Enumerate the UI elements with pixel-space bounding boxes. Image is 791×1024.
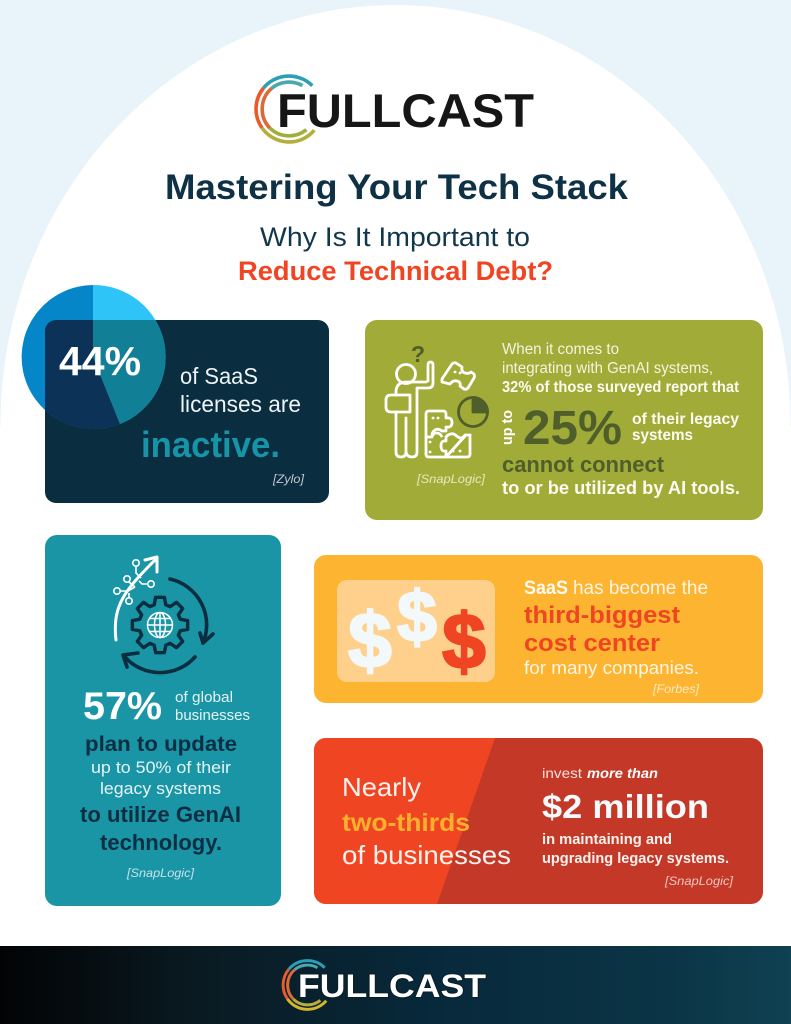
text: intro: integrating with GenAI systems,: [502, 360, 713, 377]
pie chart: 44%: [22, 285, 166, 429]
icon: small pie: [458, 398, 488, 426]
text: of SaaS licenses are: of SaaS: [180, 363, 258, 389]
title: Mastering Your Tech Stack: [165, 168, 629, 207]
text: intro: When it comes to: [502, 341, 619, 358]
stat: $2 million: $2 million: [542, 788, 709, 825]
text: of global businesses: businesses: [175, 707, 250, 724]
text: SaaS has become the: has become the: [573, 578, 708, 599]
panel: SaaS cost center: [314, 555, 763, 703]
text: in maintaining and upgrading: [542, 831, 729, 867]
source: Zylo: [Zylo]: [272, 472, 305, 486]
text: of global businesses: of global: [175, 689, 233, 706]
text: third-biggest cost center: third-biggest: [524, 602, 680, 629]
text: in maintaining and upgrading: in maintaining and: [542, 831, 672, 848]
text: to utilize GenAI technology: technology.: [100, 830, 222, 855]
text: Nearly two-thirds of businesses: of businesses: [342, 840, 511, 870]
text: to or be utilized: to or be utilized by AI tools.: [502, 478, 740, 498]
text: up to 50%: [91, 758, 231, 798]
text: up to 50%: up to 50% of their: [91, 758, 231, 777]
text: intro: [502, 341, 713, 377]
text: 32% surveyed: 32% of those surveyed report that: [502, 379, 739, 396]
text: of SaaS licenses are: licenses are: [180, 391, 301, 417]
text: Nearly two-thirds of businesses: Nearly: [342, 772, 421, 802]
icon: dollar signs: [337, 578, 495, 685]
icon: dollar signs: $: [442, 597, 486, 685]
text: up to (rotated): up to: [499, 410, 516, 445]
text: to utilize GenAI technology: [80, 802, 241, 855]
text: cannot connect: cannot connect: [502, 452, 665, 477]
text: plan to update: plan to update: [85, 733, 237, 756]
stat: 25%: 25%: [523, 402, 622, 455]
logo: Fullcast footer: [283, 961, 487, 1009]
source: Forbes: [Forbes]: [652, 682, 700, 696]
stat: 57%: 57%: [83, 685, 162, 728]
text: in maintaining and upgrading: upgrading legacy systems.: [542, 850, 729, 867]
text: of their legacy systems: [632, 411, 739, 444]
text: invest more than: more than: [587, 765, 658, 781]
text: up to 50%: legacy systems: [100, 779, 221, 798]
panel: inactive SaaS licenses: [22, 285, 329, 503]
stat: 44%: 44%: [59, 338, 141, 384]
icon: gear with globe and arrows: [114, 557, 213, 673]
text: Nearly two-thirds of businesses: [342, 772, 511, 870]
icon: question mark: ?: [411, 341, 425, 367]
text: third-biggest cost center: cost center: [524, 630, 660, 657]
source: SnapLogic: [SnapLogic]: [416, 472, 486, 486]
text: to utilize GenAI technology: to utilize GenAI: [80, 802, 241, 827]
text: Nearly two-thirds of businesses: two-thirds: [342, 809, 470, 837]
panel: two-thirds invest $2 million: [314, 738, 763, 904]
text: for many companies: for many companies.: [524, 658, 699, 678]
panel: global businesses plan to update: [45, 535, 281, 906]
footer band: [0, 946, 791, 1024]
text: of global businesses: [175, 689, 250, 724]
text: invest more than: invest: [542, 765, 582, 781]
text: invest more than: [542, 765, 658, 781]
text: third-biggest cost center: [524, 602, 680, 657]
subtitle highlight: Reduce Technical Debt?: [238, 256, 553, 286]
icon: person with puzzle pieces: [386, 362, 488, 457]
text: SaaS has become the: SaaS: [524, 578, 568, 599]
source: SnapLogic: [SnapLogic]: [664, 874, 734, 888]
subtitle: Why Is It Important to: [260, 222, 530, 252]
source: SnapLogic: [SnapLogic]: [126, 866, 195, 880]
logo: Fullcast footer: FULLCAST: [298, 968, 487, 1004]
icon: dollar signs: $: [397, 578, 437, 657]
text: of SaaS licenses are: [180, 363, 301, 417]
icon: dollar signs: $: [348, 596, 392, 684]
text: of their legacy systems: systems: [632, 427, 693, 444]
panel: GenAI legacy integration: [365, 320, 763, 520]
text: inactive: inactive.: [141, 424, 280, 465]
text: of their legacy systems: of their legacy: [632, 411, 739, 428]
logo: Fullcast header: FULLCAST: [277, 84, 534, 137]
